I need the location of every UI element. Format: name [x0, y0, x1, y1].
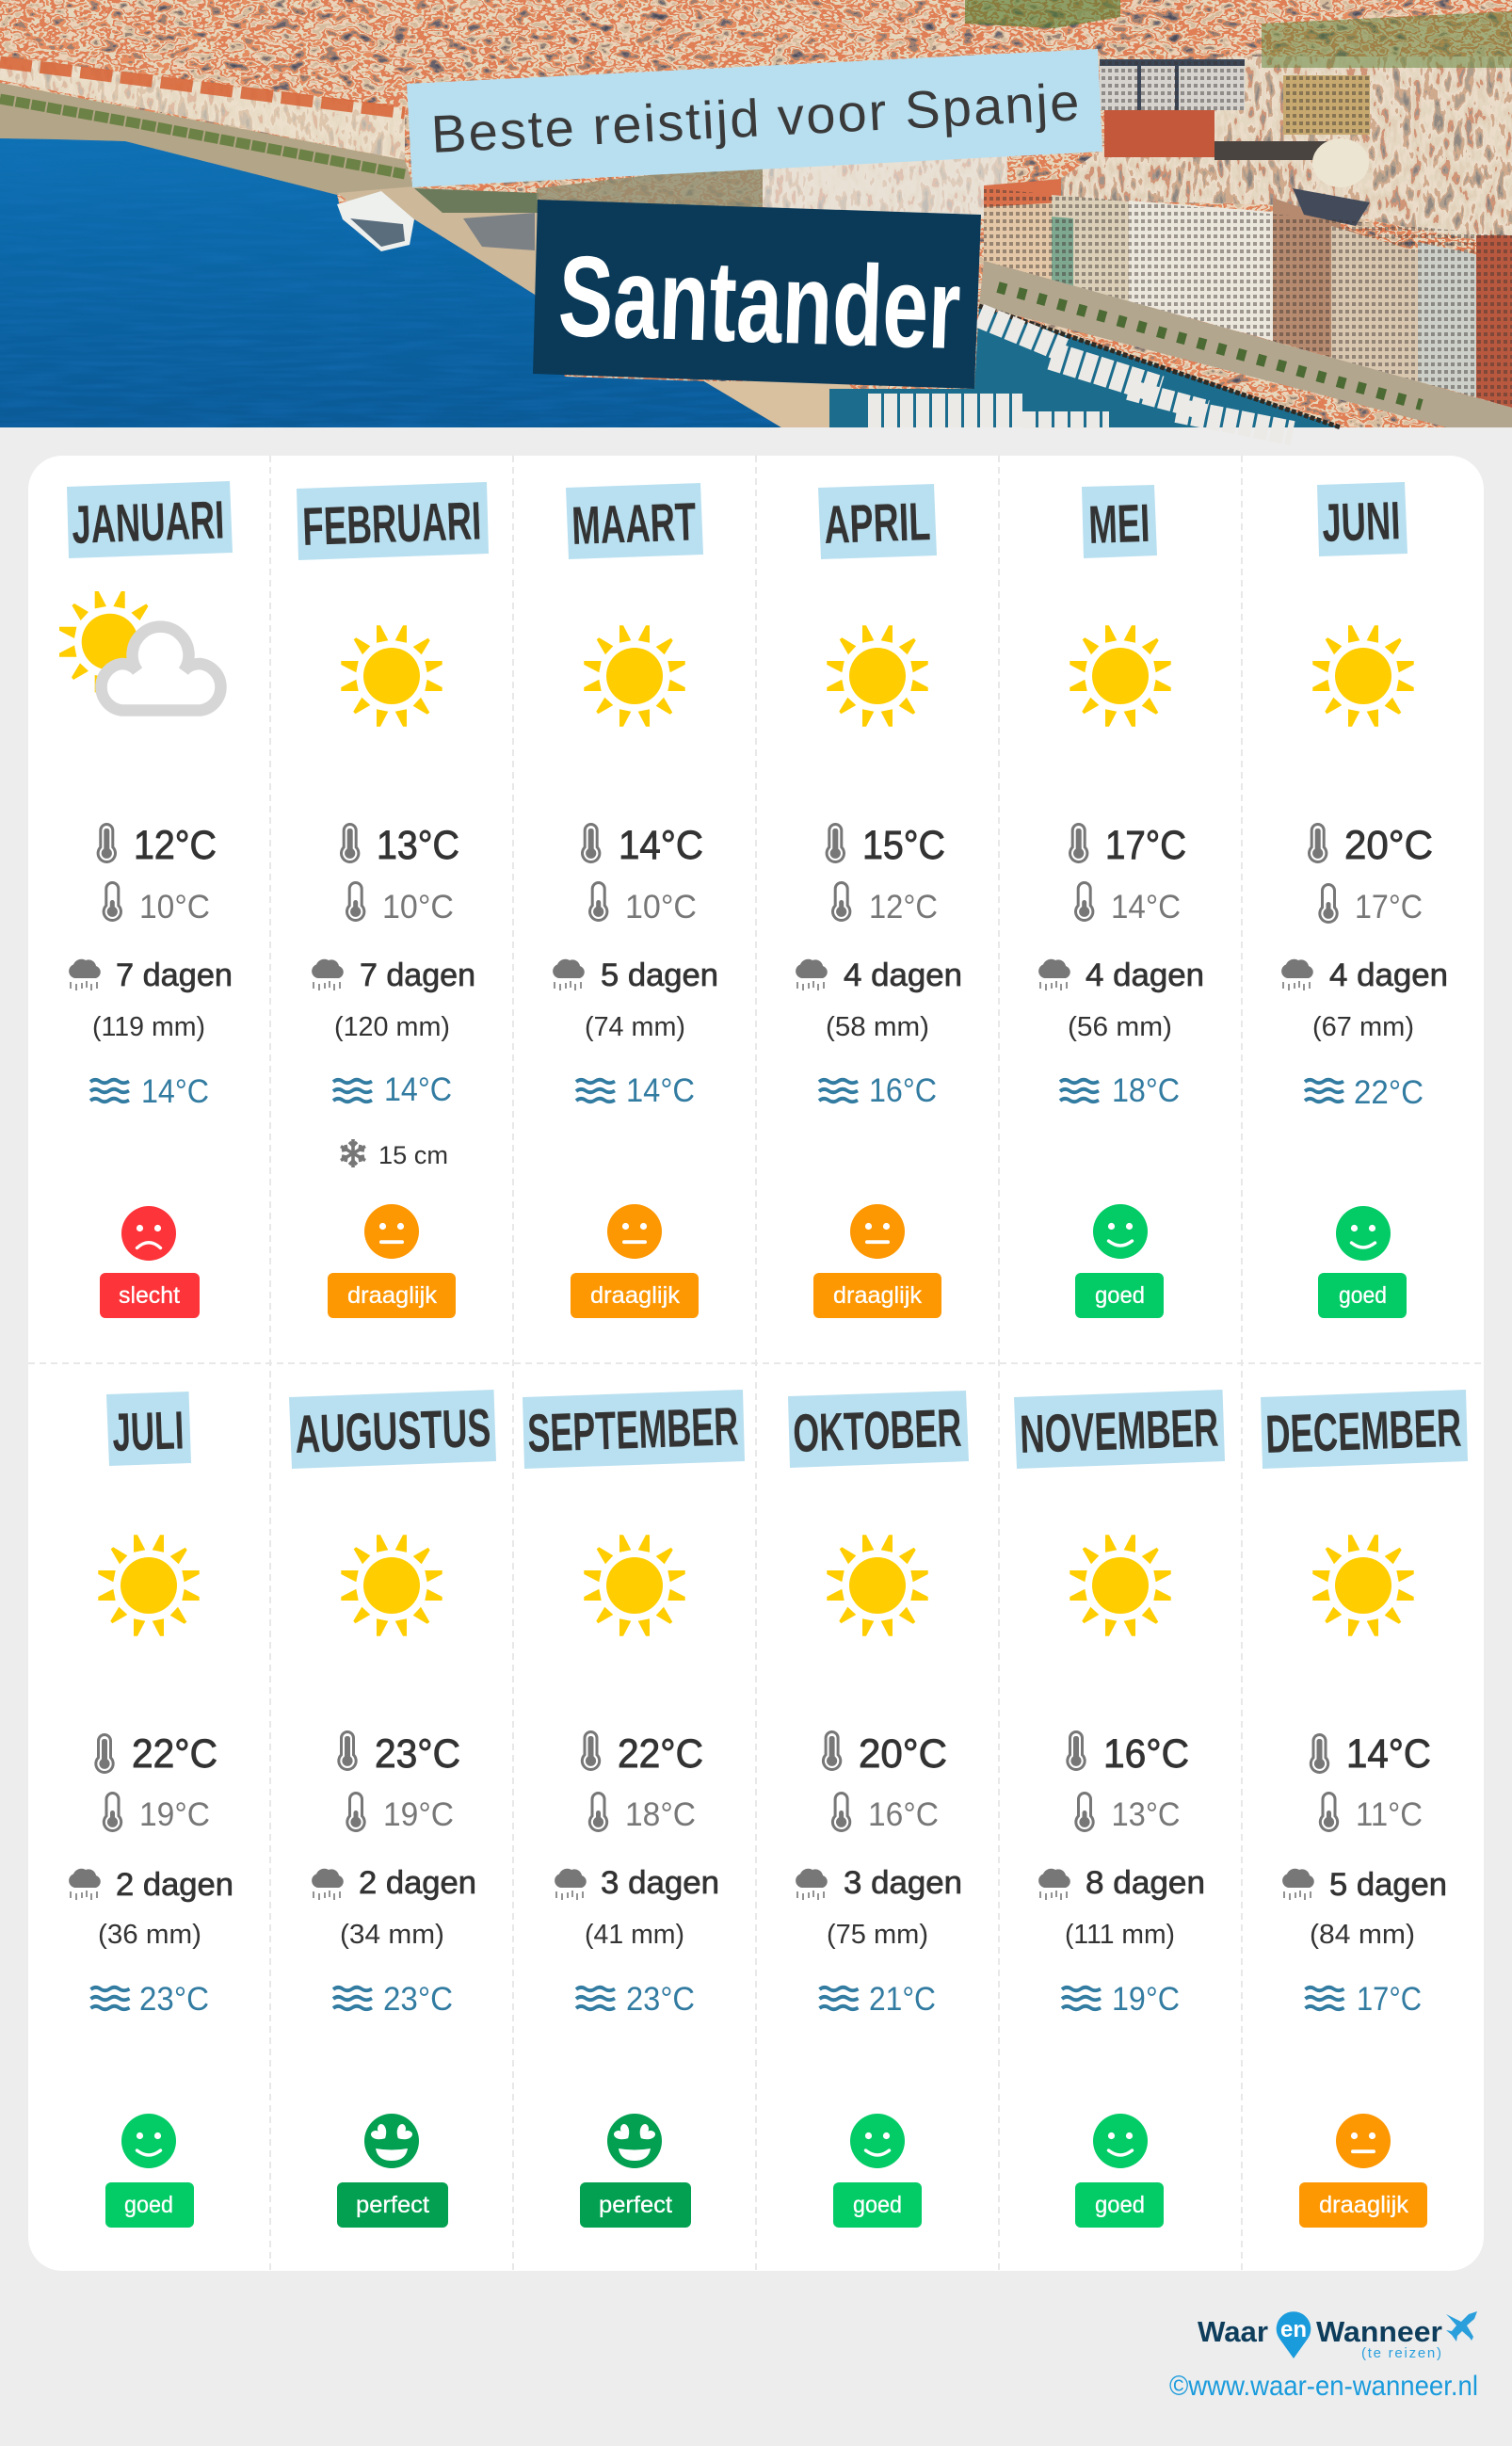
rain days: 5 dagen	[1329, 1867, 1447, 1903]
rainfall: (36 mm)	[98, 1920, 201, 1950]
rating badge: goed	[1339, 1282, 1387, 1309]
rating badge	[1318, 1273, 1407, 1318]
sea temperature: 22°C	[1354, 1074, 1424, 1111]
min temperature	[346, 1792, 454, 1833]
sea temperature	[1305, 1981, 1422, 2018]
sea temperature: 23°C	[626, 1981, 695, 2018]
rainfall: (120 mm)	[334, 1012, 450, 1042]
rating badge: perfect	[356, 2192, 429, 2218]
rating badge: perfect	[599, 2192, 672, 2218]
min temperature	[103, 1792, 210, 1833]
icon: sun	[1070, 1535, 1171, 1636]
min temperature	[831, 881, 938, 925]
rating badge	[833, 2182, 922, 2228]
max temperature	[1308, 823, 1433, 868]
rating face	[121, 1206, 176, 1261]
min temperature: 10°C	[139, 889, 210, 925]
title banner	[533, 200, 981, 389]
month label: NOVEMBER	[1019, 1398, 1219, 1465]
month label	[566, 483, 703, 559]
sea temperature: 14°C	[384, 1071, 452, 1108]
rating badge: goed	[1095, 1282, 1145, 1309]
sea temperature	[1060, 1072, 1180, 1109]
month label	[818, 484, 937, 559]
icon: map pin: en	[1280, 2317, 1307, 2342]
rainfall: (41 mm)	[585, 1920, 684, 1950]
max temperature	[94, 1731, 217, 1777]
max temperature: 12°C	[134, 823, 217, 868]
sea temperature: 16°C	[869, 1072, 937, 1109]
rain days	[1038, 1865, 1205, 1901]
month label: AUGUSTUS	[294, 1398, 491, 1465]
max temperature: 14°C	[1346, 1731, 1431, 1777]
rain days: 4 dagen	[844, 957, 962, 993]
rainfall: (75 mm)	[827, 1920, 928, 1950]
max temperature: 23°C	[375, 1731, 460, 1777]
max temperature: 20°C	[859, 1731, 947, 1777]
month: maart	[553, 483, 718, 1318]
month: december	[1261, 1390, 1468, 2228]
month label: JULI	[111, 1400, 185, 1463]
rating badge	[328, 1273, 456, 1318]
sea temperature	[90, 1073, 209, 1110]
max temperature: 20°C	[1344, 823, 1433, 868]
min temperature	[103, 881, 210, 925]
max temperature	[822, 1730, 947, 1777]
icon: sun	[98, 1535, 200, 1636]
website url: ©www.waar-en-wanneer.nl	[1169, 2371, 1478, 2402]
min temperature: 19°C	[383, 1796, 454, 1833]
month label	[1317, 482, 1407, 556]
rating badge: slecht	[119, 1282, 180, 1309]
min temperature: 14°C	[1111, 889, 1181, 925]
sea temperature: 14°C	[626, 1072, 695, 1109]
month label: MEI	[1087, 493, 1150, 555]
rating badge: goed	[124, 2192, 173, 2218]
month: oktober	[788, 1391, 969, 2228]
rating badge: goed	[853, 2192, 902, 2218]
sea temperature: 14°C	[141, 1073, 209, 1110]
max temperature	[97, 823, 217, 868]
month label: MAART	[571, 491, 697, 556]
max temperature: 22°C	[132, 1731, 217, 1777]
rain days	[553, 957, 718, 993]
rain days	[1038, 957, 1204, 993]
month label: FEBRUARI	[301, 491, 482, 557]
month label	[788, 1391, 969, 1468]
rainfall: (74 mm)	[585, 1012, 685, 1042]
min temperature	[831, 1792, 939, 1833]
rating badge	[100, 1273, 200, 1318]
rating face	[1093, 1204, 1148, 1259]
icon: sun	[584, 1535, 685, 1636]
rating face	[850, 1204, 905, 1259]
rain days	[796, 957, 962, 993]
sea temperature	[576, 1072, 695, 1109]
sea temperature	[819, 1981, 936, 2018]
month label: JANUARI	[71, 490, 225, 555]
rating face	[850, 2114, 905, 2168]
rain days: 7 dagen	[360, 957, 475, 993]
month label	[297, 482, 489, 560]
subtitle banner	[407, 49, 1102, 187]
rain days: 7 dagen	[116, 957, 233, 993]
month: april	[796, 484, 962, 1318]
icon: sun	[1070, 625, 1171, 727]
sea temperature: 23°C	[139, 1981, 209, 2018]
icon: sun	[827, 625, 928, 727]
rating face	[364, 2114, 419, 2168]
max temperature: 16°C	[1103, 1731, 1189, 1777]
min temperature: 16°C	[868, 1796, 939, 1833]
sea temperature: 19°C	[1112, 1981, 1180, 2018]
min temperature	[1074, 1792, 1181, 1833]
month: september	[523, 1390, 745, 2228]
rainfall: (56 mm)	[1068, 1012, 1172, 1042]
max temperature	[581, 823, 703, 868]
rating badge	[1075, 2182, 1164, 2228]
sea temperature	[819, 1072, 937, 1109]
max temperature: 15°C	[862, 823, 945, 868]
rating face	[1336, 1206, 1391, 1261]
rainfall: (67 mm)	[1312, 1012, 1414, 1042]
rating badge	[580, 2182, 691, 2228]
sea temperature	[90, 1981, 209, 2018]
month label: APRIL	[823, 491, 931, 555]
snow depth: 15 cm	[378, 1141, 448, 1169]
month label	[1014, 1390, 1225, 1469]
month: januari	[59, 481, 233, 1318]
icon: airplane	[1446, 2311, 1477, 2341]
min temperature: 17°C	[1355, 889, 1423, 925]
icon: sun	[584, 625, 685, 727]
rating badge	[1075, 1273, 1164, 1318]
icon: sun	[1312, 1535, 1414, 1636]
icon: sun	[341, 625, 442, 727]
max temperature	[340, 823, 459, 868]
rating face	[1336, 2114, 1391, 2168]
rain days: 4 dagen	[1329, 957, 1448, 993]
min temperature	[588, 881, 697, 925]
min temperature: 10°C	[382, 889, 454, 925]
max temperature	[337, 1730, 460, 1777]
rating face	[607, 2114, 662, 2168]
rating badge	[337, 2182, 448, 2228]
sea temperature: 17°C	[1357, 1981, 1422, 2018]
max temperature	[581, 1730, 703, 1777]
max temperature	[1069, 823, 1186, 868]
month: augustus	[289, 1390, 496, 2228]
rain days	[1281, 957, 1448, 993]
month: februari	[297, 482, 489, 1318]
sea temperature: 23°C	[383, 1981, 453, 2018]
rain days: 3 dagen	[844, 1865, 962, 1901]
min temperature: 19°C	[139, 1796, 210, 1833]
min temperature	[588, 1792, 696, 1833]
month label	[1082, 485, 1157, 558]
rainfall: (84 mm)	[1310, 1920, 1415, 1950]
sea temperature	[576, 1981, 695, 2018]
icon: sun	[827, 1535, 928, 1636]
rating badge: draaglijk	[347, 1282, 438, 1309]
rain days: 4 dagen	[1086, 957, 1204, 993]
rain days	[796, 1865, 962, 1901]
min temperature: 13°C	[1111, 1796, 1181, 1833]
month: juni	[1281, 482, 1448, 1318]
rating face	[121, 2114, 176, 2168]
snow depth	[341, 1139, 448, 1169]
month label	[523, 1390, 745, 1469]
icon: sun	[1312, 625, 1414, 727]
month label: SEPTEMBER	[526, 1396, 739, 1464]
min temperature	[346, 881, 454, 925]
month: november	[1014, 1390, 1225, 2228]
column and row dividers	[28, 456, 1484, 2271]
min temperature: 10°C	[625, 889, 697, 925]
min temperature: 12°C	[869, 889, 938, 925]
max temperature: 13°C	[377, 823, 459, 868]
rain days: 5 dagen	[601, 957, 718, 993]
white card	[28, 456, 1484, 2271]
title banner: Santander	[556, 232, 962, 373]
rating face	[607, 1204, 662, 1259]
month label	[67, 481, 233, 558]
rainfall: (34 mm)	[340, 1920, 444, 1950]
rating badge	[813, 1273, 941, 1318]
sea temperature	[333, 1071, 452, 1108]
icon: sun	[341, 1535, 442, 1636]
month label: OKTOBER	[792, 1398, 962, 1464]
icon: map pin	[1277, 2311, 1311, 2358]
rainfall: (119 mm)	[92, 1012, 205, 1042]
logo: Waar en Wanneer	[1198, 2311, 1477, 2361]
rating face	[1093, 2114, 1148, 2168]
rainfall: (111 mm)	[1065, 1920, 1175, 1950]
min temperature	[1319, 1792, 1423, 1833]
rating badge	[1299, 2182, 1427, 2228]
month: juli	[69, 1392, 233, 2228]
max temperature	[1310, 1731, 1431, 1777]
min temperature: 11°C	[1356, 1796, 1423, 1833]
rating badge	[105, 2182, 194, 2228]
min temperature	[1074, 881, 1181, 925]
hero photo: Santander waterfront	[0, 0, 1512, 433]
subtitle banner: Beste reistijd voor Spanje	[429, 72, 1081, 164]
max temperature: 17°C	[1105, 823, 1186, 868]
sea temperature: 18°C	[1112, 1072, 1180, 1109]
max temperature	[1066, 1730, 1189, 1777]
rain days: 2 dagen	[359, 1865, 476, 1901]
sea temperature: 21°C	[869, 1981, 936, 2018]
sea temperature	[333, 1981, 453, 2018]
sea temperature	[1062, 1981, 1180, 2018]
min temperature: 18°C	[625, 1796, 696, 1833]
month label: JUNI	[1321, 491, 1401, 554]
rating badge: goed	[1095, 2192, 1145, 2218]
rating badge	[571, 1273, 699, 1318]
rain days: 2 dagen	[116, 1867, 233, 1903]
month: mei	[1038, 485, 1204, 1318]
rain days: 8 dagen	[1086, 1865, 1205, 1901]
rating badge: draaglijk	[590, 1282, 681, 1309]
max temperature	[826, 823, 945, 868]
sea temperature	[1305, 1074, 1424, 1111]
icon: sun behind cloud	[59, 591, 220, 710]
rating face	[364, 1204, 419, 1259]
logo: Waar en Wanneer: Wanneer	[1316, 2315, 1442, 2348]
max temperature: 22°C	[618, 1731, 703, 1777]
month label	[106, 1392, 191, 1466]
rating badge: draaglijk	[1319, 2192, 1409, 2218]
month label	[289, 1390, 496, 1469]
rainfall: (58 mm)	[826, 1012, 929, 1042]
min temperature	[1318, 883, 1423, 925]
logo: Waar en Wanneer: (te reizen)	[1361, 2345, 1441, 2361]
rain days: 3 dagen	[601, 1865, 719, 1901]
max temperature: 14°C	[619, 823, 703, 868]
logo: Waar en Wanneer: Waar	[1198, 2315, 1268, 2348]
rating badge: draaglijk	[833, 1282, 922, 1309]
